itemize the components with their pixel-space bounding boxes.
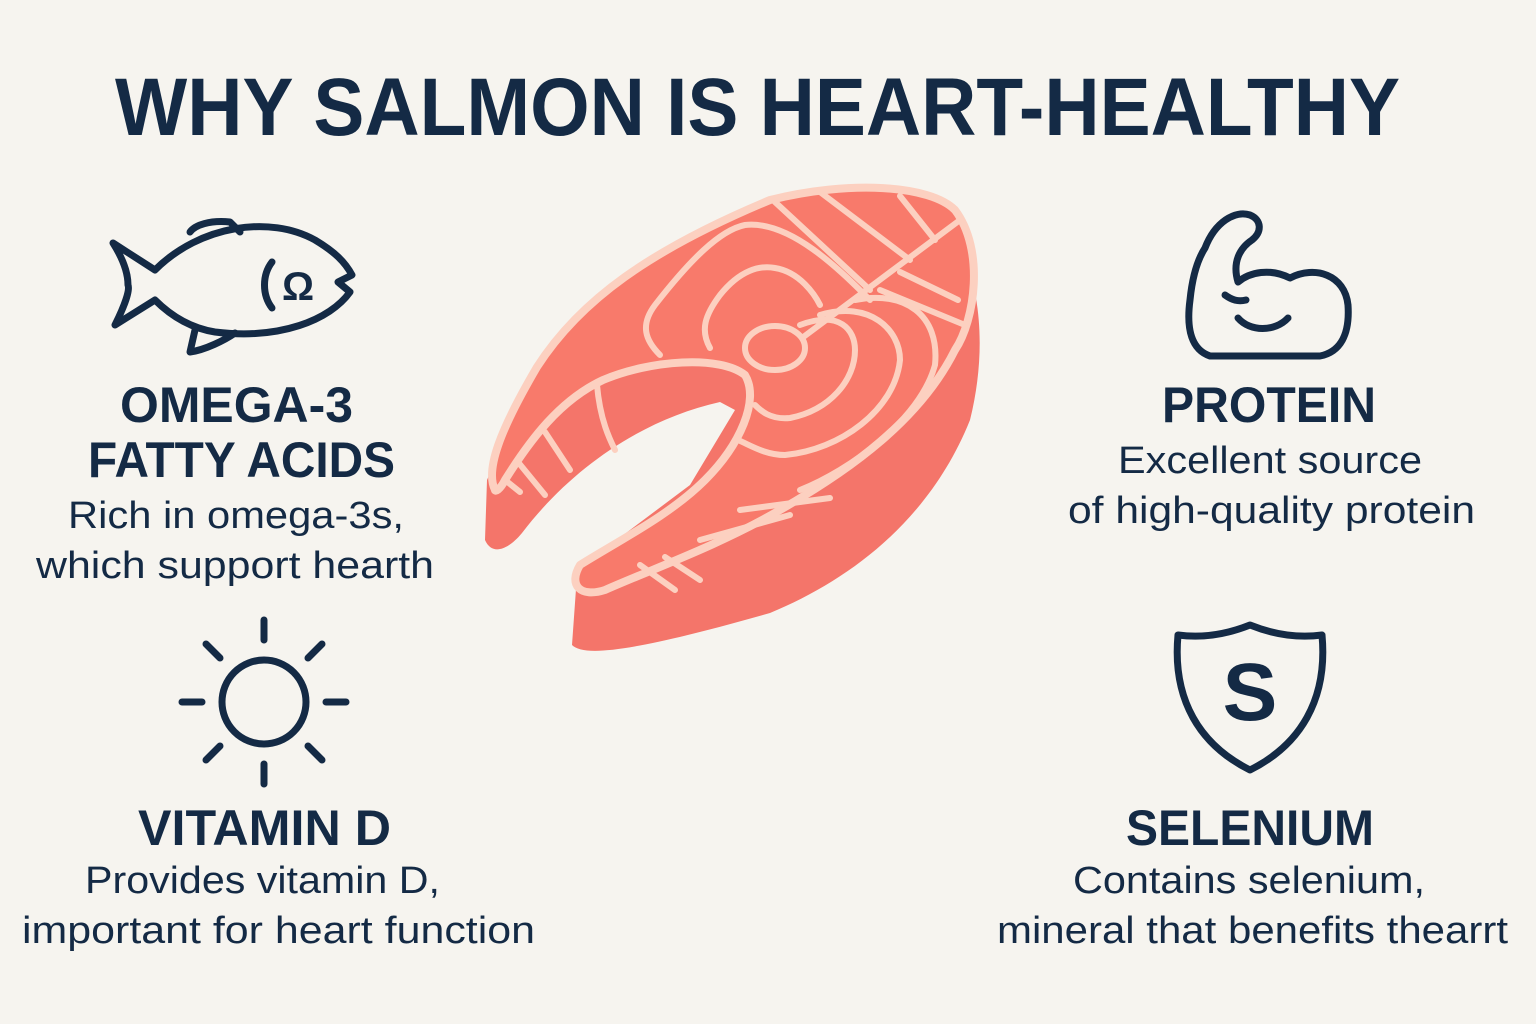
text: protein description [1068,440,1475,532]
icon: shield with S [1177,625,1323,770]
text: protein description: of high-quality protein [1068,490,1475,532]
heading: omega-3 [88,377,395,488]
icon: flexed arm [1189,214,1348,356]
text: omega-3 description [35,495,434,587]
heading: protein: PROTEIN [1162,377,1376,433]
text: omega-3 description: which support hearth [35,545,434,587]
icon: fish with omega [113,222,352,352]
text: vitamin d description [22,860,535,952]
heading: omega-3: OMEGA-3 [120,377,353,433]
text: omega-3 description: Rich in omega-3s, [68,495,404,537]
heading: selenium: SELENIUM [1126,800,1374,856]
text: protein description: Excellent source [1118,440,1422,482]
text: vitamin d description: Provides vitamin D, [85,860,440,902]
text: selenium description [997,860,1508,952]
text: selenium description: mineral that benefits thearrt [997,910,1508,952]
icon: sun [182,620,346,784]
heading: vitamin d: VITAMIN D [138,800,391,856]
text: vitamin d description: important for heart function [22,910,535,952]
illustration: salmon steak [485,188,980,651]
icon: fish with omega: Ω [282,265,314,309]
heading: omega-3: FATTY ACIDS [88,432,395,488]
icon: shield with S: S [1223,647,1277,738]
title: WHY SALMON IS HEART-HEALTHY [115,62,1400,153]
text: selenium description: Contains selenium, [1073,860,1425,902]
